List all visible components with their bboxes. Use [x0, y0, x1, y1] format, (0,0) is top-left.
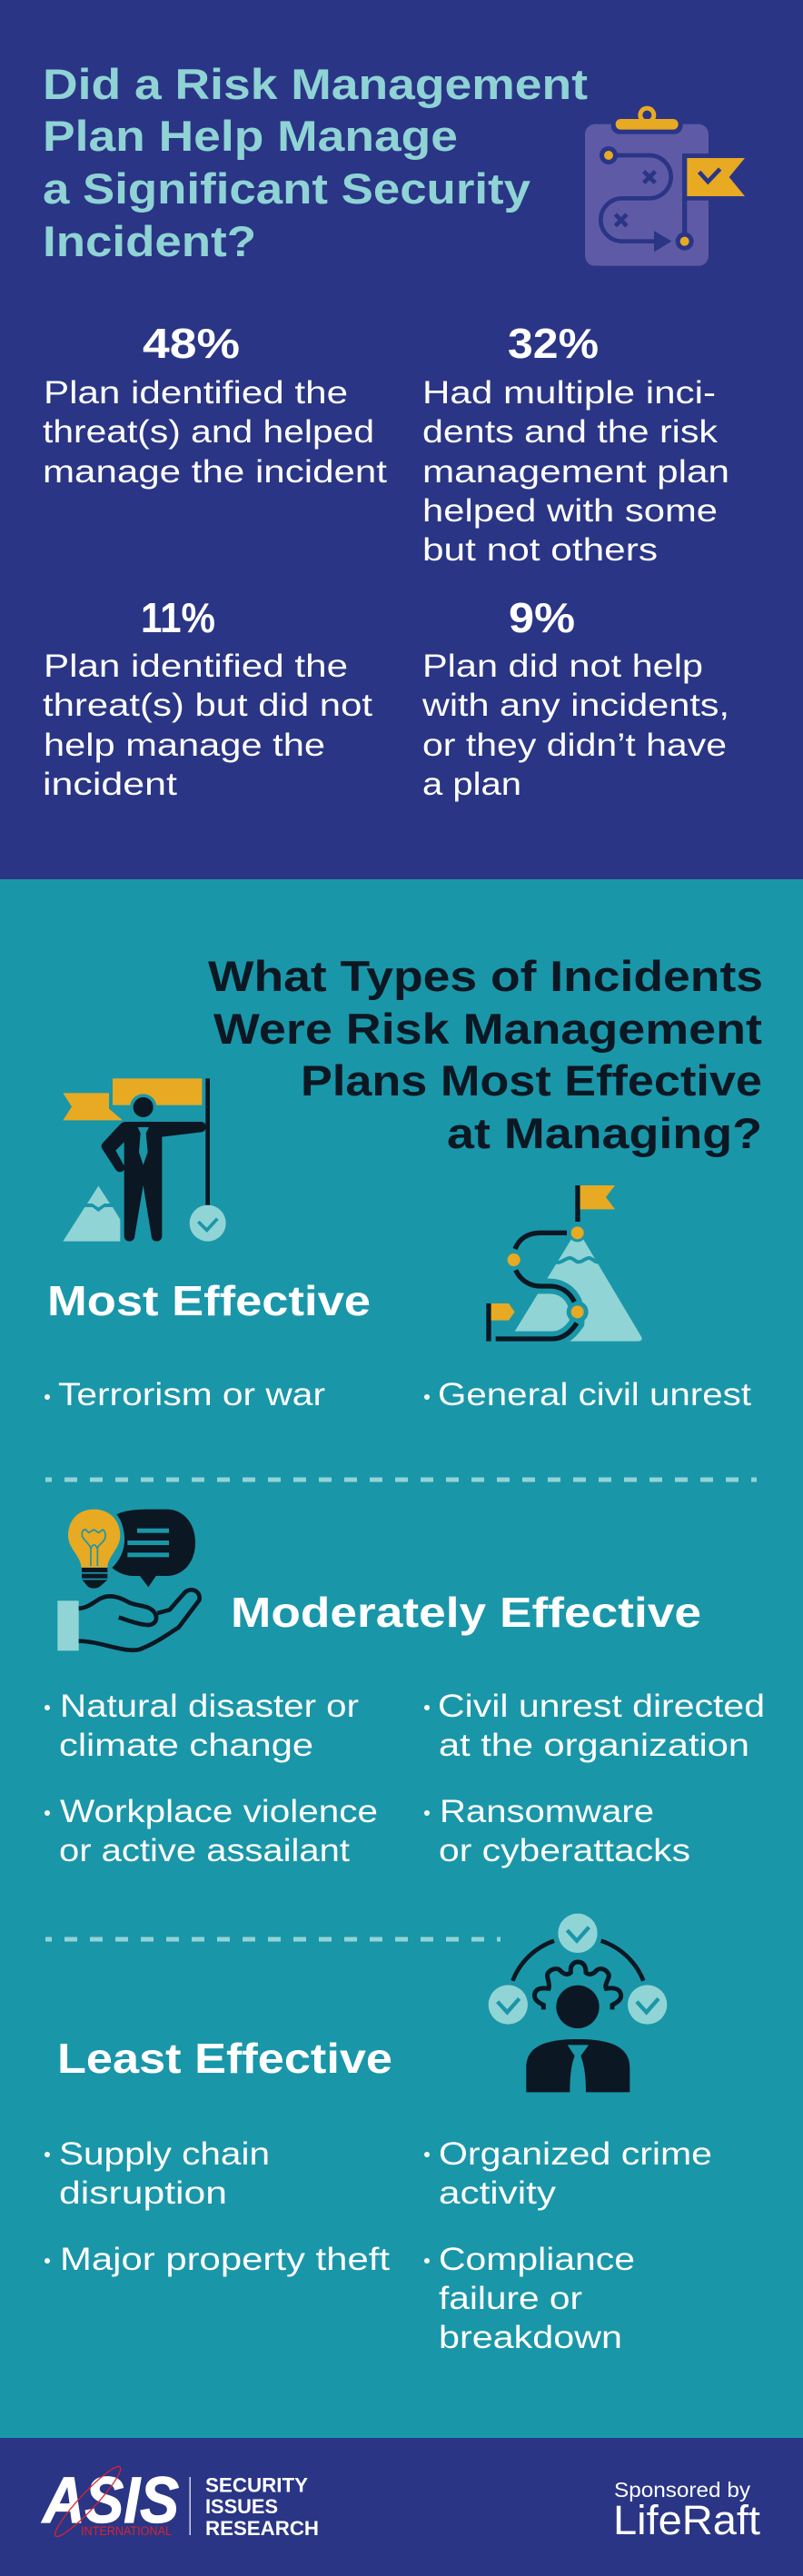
- item: natural disaster: climate change: [59, 1727, 313, 1763]
- stat: 48%: threat(s) and helped: [43, 413, 374, 450]
- panel: plan effectiveness: [0, 0, 803, 879]
- stat: 11%: 11%: [141, 594, 215, 641]
- item: organized crime: activity: [439, 2175, 556, 2211]
- text: security issues research: [205, 2474, 319, 2540]
- item: civil unrest directed: at the organization: [439, 1727, 749, 1763]
- stat: 32%: management plan: [422, 453, 729, 490]
- panel: footer: [0, 2438, 803, 2576]
- item: supply chain: Supply chain: [59, 2135, 270, 2172]
- title: Did a Risk Management: [43, 61, 588, 109]
- stat: 48%: Plan identified the: [44, 374, 348, 411]
- title: [43, 61, 588, 266]
- stat: 48%: manage the incident: [43, 453, 387, 490]
- heading: incident types: What Types of Incidents: [208, 953, 763, 1001]
- item: civil unrest directed: [424, 1688, 765, 1763]
- item: supply chain: disruption: [59, 2175, 227, 2211]
- item: organized crime: Organized crime: [439, 2135, 712, 2172]
- stat: 32%: helped with some: [422, 492, 718, 529]
- item: compliance failure: Compliance: [439, 2241, 635, 2277]
- stat: 11%: Plan identified the: [44, 648, 348, 684]
- stat: 9%: a plan: [422, 766, 521, 802]
- title: a Significant Security: [43, 165, 531, 213]
- stat: 9%: 9%: [509, 594, 575, 641]
- heading: incident types: at Managing?: [447, 1110, 762, 1158]
- heading: most effective: Most Effective: [47, 1277, 371, 1324]
- item: supply chain: [45, 2135, 270, 2211]
- item: workplace violence: or active assailant: [59, 1832, 350, 1868]
- stat: 32%: 32%: [508, 320, 599, 367]
- heading: least effective: Least Effective: [57, 2035, 392, 2082]
- item: civil unrest directed: Civil unrest directed: [438, 1688, 765, 1724]
- item: compliance failure: [424, 2241, 635, 2355]
- item: workplace violence: Workplace violence: [60, 1793, 378, 1829]
- item: ransomware: or cyberattacks: [439, 1832, 690, 1868]
- title: Plan Help Manage: [43, 113, 458, 161]
- item: general civil unrest: General civil unrest: [438, 1376, 751, 1412]
- stat: 9%: with any incidents,: [421, 687, 729, 723]
- item: compliance failure: breakdown: [439, 2319, 622, 2355]
- icon: businessman with flag: [63, 1078, 226, 1242]
- item: natural disaster: Natural disaster or: [60, 1688, 359, 1724]
- stat: 11%: threat(s) but did not: [43, 687, 372, 723]
- icon: mountain route with flags: [486, 1185, 642, 1342]
- stat: 9%: or they didn’t have: [422, 727, 727, 763]
- icon: person with gear and checkmarks: [489, 1914, 667, 2092]
- item: compliance failure: failure or: [439, 2280, 582, 2316]
- item: terrorism or war: Terrorism or war: [58, 1376, 325, 1412]
- icon: clipboard with route and flag: [585, 106, 745, 266]
- heading: incident types: [208, 953, 763, 1158]
- logo: ASIS International: INTERNATIONAL: [81, 2524, 172, 2538]
- icon: lightbulb, speech bubble and hand: [57, 1510, 200, 1650]
- stat: 11%: incident: [43, 766, 177, 802]
- stat: 11%: help manage the: [44, 727, 325, 763]
- item: major property theft: Major property theft: [60, 2241, 390, 2277]
- stat: 32%: Had multiple inci-: [422, 374, 716, 411]
- text: security issues research: SECURITY: [205, 2474, 308, 2496]
- sponsor: LifeRaft: [613, 2478, 761, 2543]
- item: workplace violence: [45, 1793, 378, 1868]
- sponsor: LifeRaft: LifeRaft: [613, 2497, 761, 2543]
- stat: 32%: [422, 320, 729, 568]
- stat: 32%: dents and the risk: [422, 413, 718, 450]
- stat: 48%: [43, 320, 387, 490]
- stat: 9%: Plan did not help: [422, 648, 703, 684]
- text: security issues research: ISSUES: [205, 2495, 278, 2518]
- sponsor: LifeRaft: Sponsored by: [614, 2478, 750, 2502]
- item: natural disaster: [45, 1688, 359, 1763]
- stat: 11%: [43, 594, 372, 802]
- panel: incident types: [0, 879, 803, 2438]
- heading: incident types: Plans Most Effective: [301, 1057, 762, 1105]
- stat: 48%: 48%: [143, 320, 240, 367]
- logo: ASIS International: ASIS: [41, 2465, 179, 2537]
- heading: moderately effective: Moderately Effective: [231, 1589, 701, 1636]
- text: security issues research: RESEARCH: [205, 2517, 319, 2540]
- item: ransomware: Ransomware: [440, 1793, 654, 1829]
- stat: 32%: but not others: [422, 531, 658, 568]
- title: Incident?: [43, 218, 256, 266]
- item: organized crime: [424, 2135, 712, 2211]
- stat: 9%: [421, 594, 729, 802]
- item: ransomware: [424, 1793, 690, 1868]
- heading: incident types: Were Risk Management: [213, 1006, 762, 1054]
